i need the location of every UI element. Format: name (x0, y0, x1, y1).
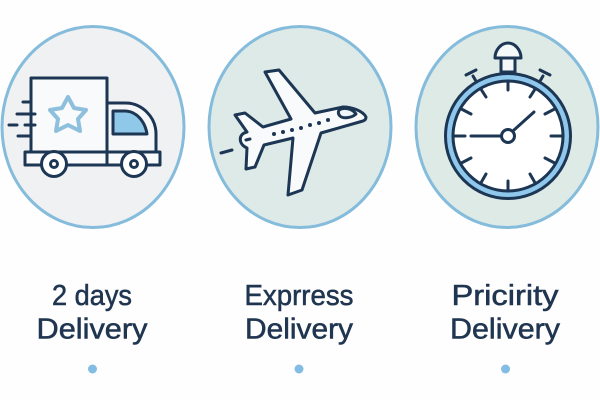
label: express delivery (244, 280, 354, 346)
label: 2 days delivery: Delivery (36, 314, 148, 346)
icon: delivery truck (9, 78, 160, 176)
label: priority delivery (450, 280, 561, 346)
label: 2 days delivery: 2 days (52, 280, 132, 312)
circle: truck background (2, 26, 184, 228)
marker dot: first column (88, 364, 97, 374)
label: priority delivery: Delivery (450, 314, 561, 346)
circle: plane background (209, 26, 391, 228)
panel: 2 days delivery (2, 26, 184, 228)
panel: express delivery (209, 26, 391, 228)
circle: stopwatch background (416, 26, 598, 228)
label: priority delivery: Pricirity (452, 280, 559, 312)
icon: airplane (221, 70, 366, 195)
label: express delivery: Exprress (244, 280, 354, 312)
panel: priority delivery (416, 26, 598, 228)
label: 2 days delivery (36, 280, 148, 346)
marker dot: second column (294, 364, 304, 374)
marker dot: third column (501, 364, 510, 374)
icon: stopwatch (446, 43, 570, 198)
label: express delivery: Delivery (245, 314, 354, 346)
